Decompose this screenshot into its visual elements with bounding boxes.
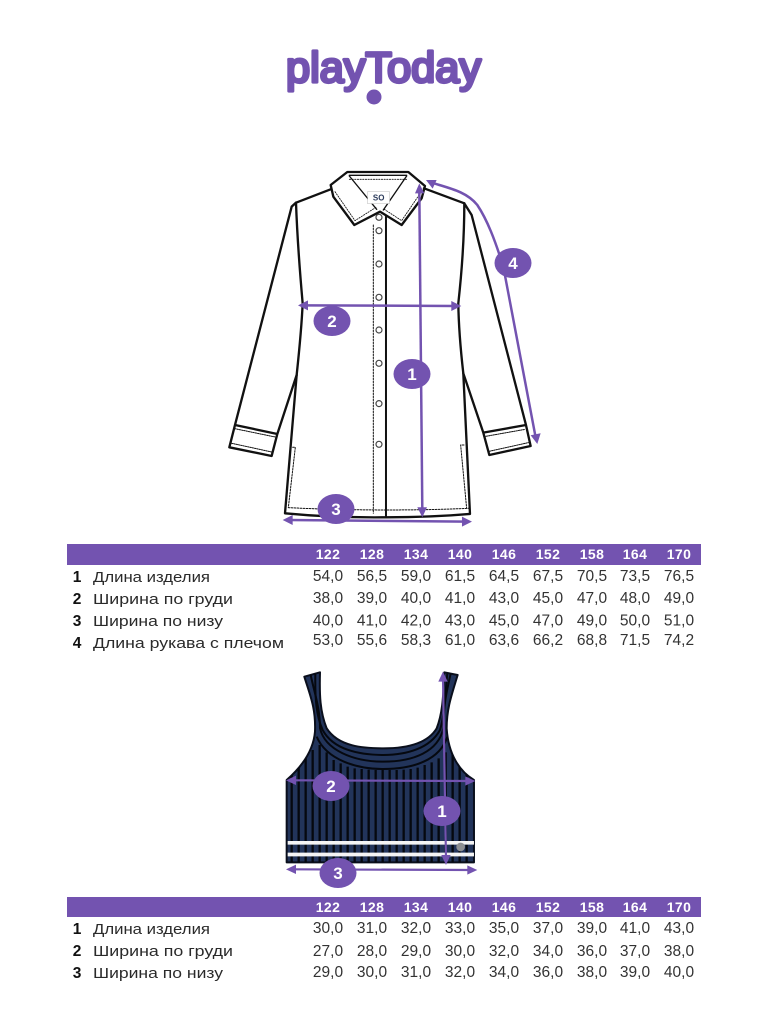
row 2: 38,0 (313, 590, 343, 607)
shirt technical drawing (229, 172, 531, 517)
row 2 (73, 943, 694, 960)
table 2 header: 140 (448, 899, 472, 915)
row 1: 56,5 (357, 568, 387, 585)
table 2 (67, 897, 701, 982)
row 3: 42,0 (401, 612, 431, 630)
row 4: 63,6 (489, 632, 519, 649)
tank top body (287, 672, 474, 862)
table 1 header: 158 (580, 546, 604, 562)
row 2: 2 (73, 943, 81, 960)
ribs (292, 674, 467, 865)
table 1 header: 170 (667, 546, 691, 562)
badge 1 (424, 796, 460, 826)
row 3: 40,0 (664, 964, 694, 981)
badge 3 (318, 494, 354, 524)
row 3: 43,0 (445, 612, 475, 630)
table 1 (67, 544, 701, 652)
arrow 1: length (443, 678, 446, 858)
row 1: 73,5 (620, 568, 650, 585)
table 2 header (67, 897, 701, 917)
row 1: 70,5 (577, 568, 607, 585)
table 1 header (67, 544, 701, 565)
shirt body outline (285, 188, 470, 517)
row 1: 76,5 (664, 568, 694, 585)
row 4: 55,6 (357, 632, 387, 649)
row 3: 39,0 (620, 964, 650, 981)
badge 2: 2 (327, 312, 337, 331)
cuff stitching (232, 429, 528, 452)
row 3: 3 (73, 965, 82, 982)
buttons (376, 214, 382, 447)
row 4: 74,2 (664, 632, 694, 649)
arrow 2: chest (292, 777, 470, 784)
row 4: 61,0 (445, 632, 475, 649)
badge 2: 2 (326, 777, 336, 796)
row 2: 41,0 (445, 590, 475, 607)
row 4: Длина рукава с плечом (93, 635, 284, 652)
badge 2 (314, 306, 350, 336)
badge on hem (456, 843, 465, 851)
arrow 4: sleeve (432, 183, 536, 437)
badge 3 (320, 858, 356, 888)
row 4: 58,3 (401, 632, 431, 649)
neck label: SO (373, 194, 384, 203)
badge 3: 3 (333, 864, 343, 883)
row 3 (73, 964, 694, 982)
row 3: 49,0 (577, 612, 607, 630)
row 2: 36,0 (577, 943, 607, 960)
tank top drawing (287, 672, 474, 865)
row 3: 38,0 (577, 964, 607, 981)
row 2: Ширина по груди (93, 943, 233, 960)
row 2: 45,0 (533, 590, 563, 607)
badge 4: 4 (508, 254, 518, 273)
row 2: 47,0 (577, 590, 607, 607)
table 2 header: 164 (623, 899, 647, 915)
row 4: 68,8 (577, 632, 607, 649)
row 3 (73, 612, 694, 630)
row 2: Ширина по груди (93, 591, 233, 608)
row 1: 33,0 (445, 920, 475, 937)
row 1: 43,0 (664, 920, 694, 937)
row 1: Длина изделия (93, 921, 210, 938)
row 2: 2 (73, 591, 81, 608)
right sleeve (463, 203, 531, 455)
row 3: 34,0 (489, 964, 519, 981)
row 2: 27,0 (313, 943, 343, 960)
row 2: 28,0 (357, 943, 387, 960)
row 1: 61,5 (445, 568, 475, 585)
row 3: 31,0 (401, 964, 431, 981)
row 3: 45,0 (489, 612, 519, 630)
row 2 (73, 590, 694, 608)
collar inner neck (349, 175, 407, 210)
row 4: 53,0 (313, 632, 343, 649)
row 4: 4 (73, 635, 82, 652)
row 2: 30,0 (445, 943, 475, 960)
table 1 header: 152 (536, 546, 560, 562)
row 1: 31,0 (357, 920, 387, 937)
row 3: 47,0 (533, 612, 563, 630)
row 1 (73, 568, 694, 586)
row 1: 67,5 (533, 568, 563, 585)
collar stitching (335, 179, 421, 221)
table 2 header: 122 (316, 899, 340, 915)
table 1 header: 128 (360, 546, 384, 562)
table 1 header: 146 (492, 546, 516, 562)
badge 3: 3 (331, 500, 341, 519)
row 3: 41,0 (357, 612, 387, 630)
row 3: 36,0 (533, 964, 563, 981)
row 1: Длина изделия (93, 569, 210, 586)
row 1 (73, 920, 694, 938)
table 1 header: 164 (623, 546, 647, 562)
row 3: 40,0 (313, 612, 343, 630)
table 1 header: 134 (404, 546, 428, 562)
badge 4 (494, 248, 532, 278)
row 4: 71,5 (620, 632, 650, 649)
placket and hem stitching (288, 225, 468, 513)
table 2 header: 170 (667, 899, 691, 915)
placket (383, 217, 389, 517)
row 1: 54,0 (313, 568, 343, 585)
row 1: 37,0 (533, 920, 563, 937)
row 2: 49,0 (664, 590, 694, 607)
arrow 1: length (419, 190, 422, 511)
arrow 3: hem (288, 520, 467, 522)
arrow 2: chest (303, 302, 456, 310)
left sleeve (229, 203, 297, 456)
row 1: 1 (73, 921, 82, 938)
row 3: 3 (73, 613, 82, 630)
neck label (368, 192, 390, 204)
badge 2 (312, 771, 350, 801)
badge 1 (394, 359, 430, 389)
row 3: 29,0 (313, 964, 343, 981)
row 3: 51,0 (664, 612, 694, 630)
row 3: 32,0 (445, 964, 475, 981)
table 2 header: 146 (492, 899, 516, 915)
table 2 header: 152 (536, 899, 560, 915)
row 1: 59,0 (401, 568, 431, 585)
row 2: 48,0 (620, 590, 650, 607)
row 2: 32,0 (489, 943, 519, 960)
row 3: 30,0 (357, 964, 387, 981)
row 2: 38,0 (664, 943, 694, 960)
row 4 (73, 632, 694, 652)
row 2: 29,0 (401, 943, 431, 960)
table 1 header: 122 (316, 546, 340, 562)
row 1: 1 (73, 569, 82, 586)
tank measurement arrows (286, 672, 477, 875)
row 2: 39,0 (357, 590, 387, 607)
white stripes (288, 841, 474, 856)
logo: playToday (286, 44, 481, 92)
row 1: 35,0 (489, 920, 519, 937)
row 3: Ширина по низу (93, 965, 224, 982)
row 4: 66,2 (533, 632, 563, 649)
shirt measurement arrows (283, 180, 541, 527)
table 2 header: 158 (580, 899, 604, 915)
row 1: 64,5 (489, 568, 519, 585)
row 2: 40,0 (401, 590, 431, 607)
row 3: 50,0 (620, 612, 650, 630)
badge 1: 1 (407, 365, 417, 384)
row 1: 32,0 (401, 920, 431, 937)
table 2 header: 134 (404, 899, 428, 915)
collar (331, 172, 425, 225)
row 3: Ширина по низу (93, 613, 224, 630)
badge 1: 1 (437, 802, 447, 821)
row 2: 37,0 (620, 943, 650, 960)
table 1 header: 140 (448, 546, 472, 562)
arrow 3: hem (292, 866, 472, 873)
table 2 header: 128 (360, 899, 384, 915)
row 2: 34,0 (533, 943, 563, 960)
row 1: 30,0 (313, 920, 343, 937)
row 1: 39,0 (577, 920, 607, 937)
row 1: 41,0 (620, 920, 650, 937)
row 2: 43,0 (489, 590, 519, 607)
